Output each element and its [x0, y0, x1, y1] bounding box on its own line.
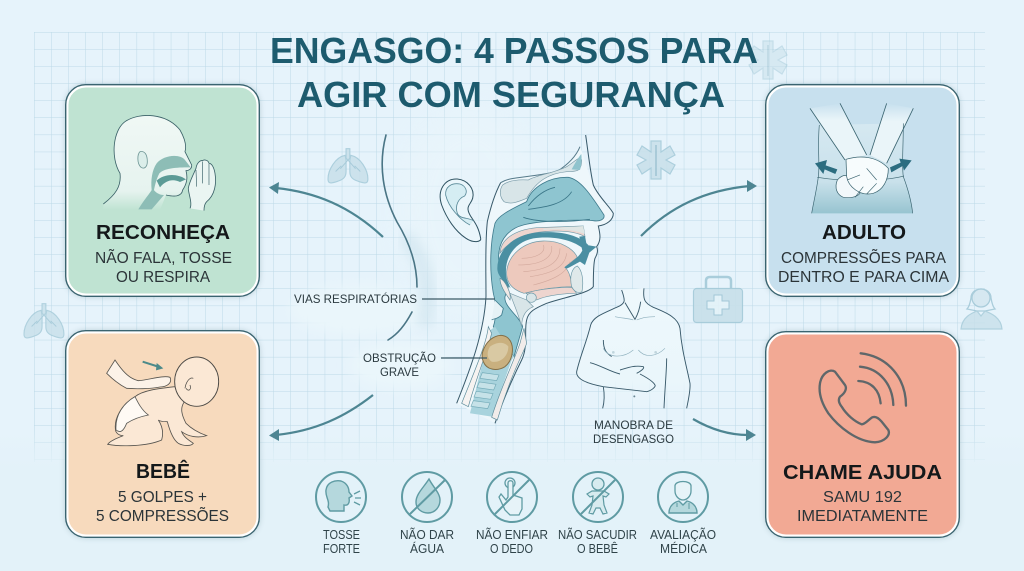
tip: não enfiar o dedo: O DEDO — [490, 542, 533, 556]
panel: adulto: DENTRO E PARA CIMA — [778, 269, 950, 286]
airway teal — [491, 177, 604, 357]
dark palate band — [497, 232, 588, 288]
tip: tosse forte — [316, 472, 366, 556]
navel — [633, 395, 635, 397]
nasal sinus small — [572, 154, 582, 170]
icon: head with airway and hand — [103, 115, 216, 211]
panel: chame ajuda: SAMU 192 — [823, 489, 902, 506]
panel: chame ajuda: IMEDIATAMENTE — [797, 508, 928, 525]
ear — [440, 179, 481, 242]
palate pink and bone — [500, 226, 585, 253]
profile outlines — [457, 135, 613, 423]
panel: reconheça: OU RESPIRA — [116, 269, 211, 286]
label: obstrução grave — [363, 351, 487, 379]
label: obstrução grave: GRAVE — [380, 365, 419, 379]
panel: adulto — [765, 84, 960, 297]
panel: bebê: 5 GOLPES + — [118, 489, 207, 506]
title: ENGASGO: 4 PASSOS PARA — [270, 30, 758, 71]
larynx fold — [492, 300, 503, 320]
label: manobra de desengasgo — [593, 418, 674, 446]
illustration: torso manobra — [577, 288, 690, 410]
panel: adulto: COMPRESSÕES PARA — [781, 250, 947, 267]
icon: nurse — [961, 289, 1002, 329]
mouth — [564, 236, 597, 269]
under tongue — [526, 287, 577, 300]
arrow: to adulto — [641, 180, 757, 236]
label: manobra de desengasgo: DESENGASGO — [593, 432, 674, 446]
arrow: to chame ajuda — [693, 419, 756, 441]
icon: baby with hand on back — [107, 357, 219, 446]
panel: bebê — [65, 330, 260, 538]
panel: bebê: BEBÊ — [136, 459, 190, 483]
tip: não sacudir o bebê: NÃO SACUDIR — [558, 528, 637, 542]
panel: reconheça — [65, 84, 260, 297]
panel: reconheça: RECONHEÇA — [96, 222, 230, 244]
tip: não enfiar o dedo: NÃO ENFIAR — [476, 528, 548, 542]
tip: não enfiar o dedo — [476, 472, 548, 556]
panel: bebê: 5 COMPRESSÕES — [96, 508, 229, 525]
panel: chame ajuda: CHAME AJUDA — [783, 462, 942, 484]
arrow: to bebê — [269, 395, 373, 441]
panel: adulto: ADULTO — [822, 222, 906, 244]
sinus bone — [500, 158, 582, 203]
tip: tosse forte: TOSSE — [323, 528, 360, 542]
trachea rings — [471, 373, 499, 409]
tip: avaliação médica — [650, 472, 716, 556]
label: obstrução grave: OBSTRUÇÃO — [363, 351, 436, 365]
tip: não sacudir o bebê: O BEBÊ — [577, 541, 618, 556]
tip: não dar água: NÃO DAR — [400, 528, 454, 542]
obstruction food bolus — [482, 335, 512, 369]
icon: star of life center — [637, 141, 675, 179]
icon row: safety tips — [316, 472, 716, 556]
tip: tosse forte: FORTE — [323, 542, 360, 556]
tip: não dar água — [400, 472, 454, 556]
tip: avaliação médica: AVALIAÇÃO — [650, 528, 716, 542]
icon: hands on abdomen with arrows — [810, 103, 913, 213]
icon: lungs far left — [24, 304, 64, 338]
tongue fibers — [518, 245, 570, 285]
tip: não sacudir o bebê — [558, 472, 637, 556]
tip: não dar água: ÁGUA — [410, 541, 445, 556]
panel: chame ajuda — [765, 331, 960, 538]
title: AGIR COM SEGURANÇA — [297, 74, 725, 115]
tongue — [507, 241, 577, 293]
tip: avaliação médica: MÉDICA — [660, 541, 708, 556]
title — [270, 30, 758, 115]
icon: medical kit — [694, 277, 742, 322]
illustration: neck outline left — [382, 135, 427, 340]
icon: lungs left — [328, 149, 368, 183]
illustration: throat anatomy — [440, 135, 613, 423]
trachea tube — [470, 327, 514, 417]
turbinates — [523, 187, 590, 221]
face and neck skin — [457, 147, 613, 423]
bolus highlight — [488, 343, 508, 362]
label: manobra de desengasgo: MANOBRA DE — [594, 418, 673, 432]
label: vias respiratórias: VIAS RESPIRATÓRIAS — [294, 291, 417, 306]
epiglottis and hyoid — [500, 278, 510, 300]
panel: reconheça: NÃO FALA, TOSSE — [95, 250, 232, 267]
icon: phone with signal waves — [820, 353, 906, 442]
chin bone — [571, 266, 583, 292]
icon: star of life top right — [749, 41, 787, 79]
arrow: to reconheça — [269, 182, 383, 237]
